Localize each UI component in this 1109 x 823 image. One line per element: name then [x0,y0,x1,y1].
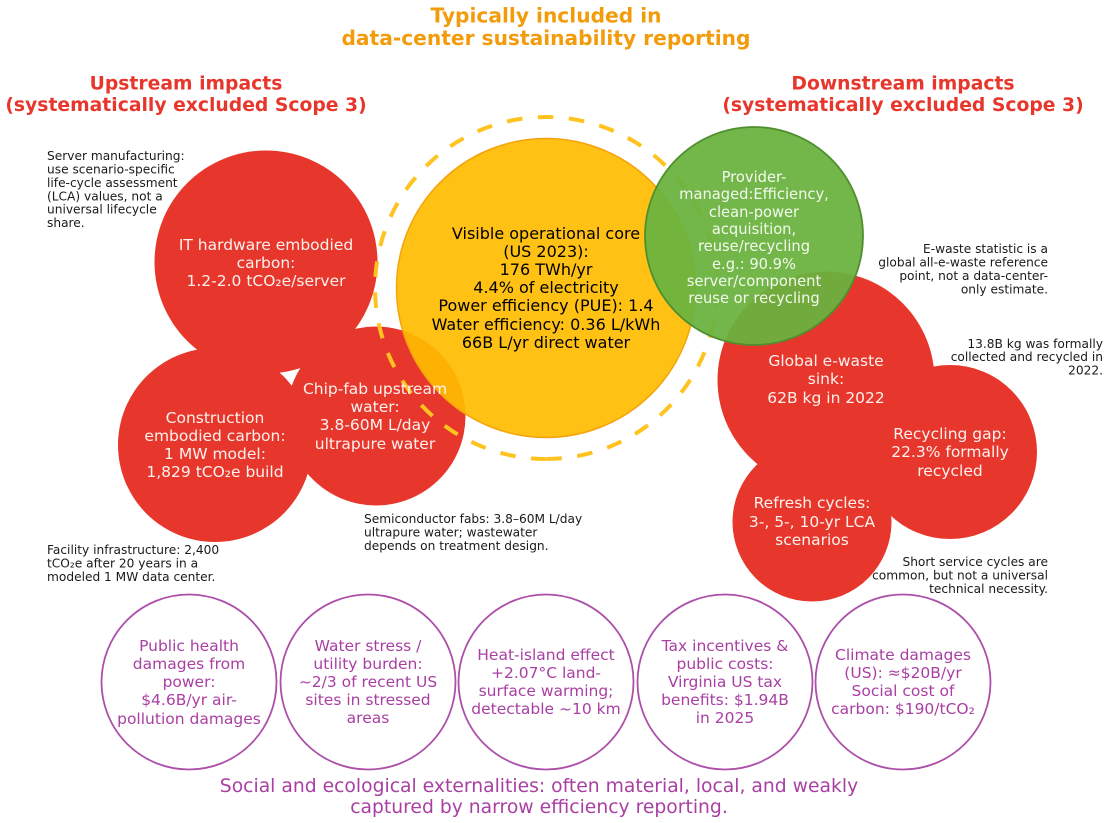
label: operational core: Power efficiency (PUE): 1.4 [438,296,654,315]
label: recycling gap [891,425,1009,480]
label: operational core: Water efficiency: 0.36 L/kWh [432,315,660,334]
label: IT hardware: IT hardware embodied [179,236,353,254]
externality: public health: $4.6B/yr air- [141,691,237,709]
externality: water stress: ~2/3 of recent US [299,673,437,691]
note: formally collected [951,337,1103,378]
label: provider-managed: server/component [687,273,822,290]
label: chip-fab [303,380,447,453]
circle: refresh cycles [732,442,892,602]
note: facility infrastructure: modeled 1 MW data center. [47,570,215,584]
externality: tax incentives: Tax incentives & [661,637,788,655]
label: operational core: Visible operational core [452,224,640,243]
caption: social and ecological externalities [220,776,858,818]
label: IT hardware: carbon: [237,254,295,272]
externality: tax incentives: in 2025 [696,709,754,727]
label: e-waste: sink: [808,370,844,388]
externality: water stress: Water stress / [315,637,422,655]
circle: construction embodied carbon [118,348,312,542]
externality: tax incentives [638,594,812,770]
externality: heat island: Heat-island effect [477,646,615,664]
externality: tax incentives: public costs: [676,655,774,673]
title: Typically included in [431,4,661,28]
externality: public health: pollution damages [117,710,261,728]
externality: tax incentives: Virginia US tax [668,673,782,691]
externality: heat island: +2.07°C land- [491,664,601,682]
externality: public health [102,594,276,770]
note: server manufacturing: life-cycle assessment [47,176,178,190]
label: chip-fab: 3.8-60M L/day [320,416,430,434]
label: IT hardware [179,236,353,290]
note: short service cycles [872,555,1048,596]
externality: water stress: areas [347,709,389,727]
label: refresh cycles [749,494,875,549]
label: construction: 1 MW model: [164,445,266,463]
circle: IT hardware embodied carbon [154,150,378,374]
circle: recycling gap [863,365,1037,539]
label: refresh cycles: scenarios [775,531,849,549]
label: provider-managed: Provider- [722,169,786,186]
externality: public health: Public health [139,637,239,655]
label: refresh cycles: 3-, 5-, 10-yr LCA [749,513,875,531]
note: server manufacturing: universal lifecycle [47,203,157,217]
label: provider-managed: clean-power [709,204,800,221]
note: e-waste statistic: E-waste statistic is a [923,242,1048,256]
note: short service cycles: common, but not a universal [872,568,1048,582]
externality: water stress: utility burden: [313,655,423,673]
externality: water stress: sites in stressed [305,691,431,709]
label: operational core: 4.4% of electricity [473,278,619,297]
title: data-center sustainability reporting [341,26,751,50]
circle: global e-waste sink [718,272,934,488]
label: recycling gap: 22.3% formally [891,443,1009,461]
note: formally collected: 2022. [1068,364,1103,378]
heading: upstream impacts: Upstream impacts [90,74,282,94]
label: construction: embodied carbon: [144,427,286,445]
externality: public health: damages from [133,655,245,673]
note: semiconductor fabs: Semiconductor fabs: 3.8–60M L/day [364,512,582,526]
note: short service cycles: technical necessity. [929,582,1048,596]
note: e-waste statistic: global all-e-waste reference [878,256,1048,270]
note: facility infrastructure: tCO₂e after 20 years in a [47,556,198,570]
label: chip-fab: water: [350,398,400,416]
note: e-waste statistic: point, not a data-center- [899,269,1048,283]
label: provider-managed: managed:Efficiency, [679,186,829,203]
note: formally collected: 13.8B kg was formally [967,337,1103,351]
externality: climate damages [816,594,990,770]
externality: climate damages: (US): ≈$20B/yr [844,664,962,682]
note: e-waste statistic: only estimate. [961,282,1048,296]
label: chip-fab: Chip-fab upstream [303,380,447,398]
label: chip-fab: ultrapure water [315,435,436,453]
label: construction: 1,829 tCO₂e build [146,463,284,481]
label: provider-managed: e.g.: 90.9% [712,256,796,273]
label: construction: Construction [166,409,264,427]
circle: visible operational core [396,138,696,438]
note: server manufacturing: share. [47,216,85,230]
label: provider-managed [679,169,829,307]
note: server manufacturing: (LCA) values, not a [47,189,163,203]
note: server manufacturing [47,149,185,230]
label: IT hardware: 1.2-2.0 tCO₂e/server [187,272,346,290]
label: recycling gap: recycled [917,462,983,480]
label: provider-managed: reuse or recycling [688,290,820,307]
label: refresh cycles: Refresh cycles: [754,494,870,512]
note: formally collected: collected and recycled in [951,350,1103,364]
note: semiconductor fabs: depends on treatment design. [364,539,549,553]
externality: climate damages: Social cost of [852,682,955,700]
caption: social and ecological externalities: captured by narrow efficiency reporting. [350,797,728,818]
title [341,4,751,50]
heading: upstream impacts [5,74,367,116]
externality: public health: power: [163,673,215,691]
circle: provider-managed [645,127,863,345]
note: server manufacturing: use scenario-specific [47,162,175,176]
externality: climate damages: carbon: $190/tCO₂ [831,700,975,718]
label: operational core: 66B L/yr direct water [462,333,631,352]
label: construction [144,409,286,481]
heading: downstream impacts [722,74,1084,116]
note: short service cycles: Short service cycles are [902,555,1048,569]
heading: upstream impacts: (systematically excluded Scope 3) [5,95,367,116]
label: recycling gap: Recycling gap: [893,425,1007,443]
circle: chip-fab upstream water [286,326,466,506]
label: e-waste [767,352,885,407]
externality: water stress [280,594,456,770]
label: e-waste: 62B kg in 2022 [767,389,885,407]
externality: heat island: surface warming; [479,682,613,700]
externality: tax incentives: benefits: $1.94B [661,691,789,709]
externality: climate damages: Climate damages [835,646,971,664]
label: operational core: (US 2023): [503,242,589,261]
label: operational core: 176 TWh/yr [500,260,593,279]
caption: social and ecological externalities: Social and ecological externalities: often material, local, and weakly [220,776,858,797]
dashed ring: operational boundary [375,117,717,459]
note: facility infrastructure: Facility infrastructure: 2,400 [47,543,219,557]
label: provider-managed: reuse/recycling [698,238,810,255]
heading: downstream impacts: Downstream impacts [791,74,1015,94]
note: semiconductor fabs [364,512,582,553]
label: provider-managed: acquisition, [712,221,796,238]
externality: heat island [458,594,634,770]
note: facility infrastructure [47,543,219,584]
label: operational core [432,224,660,352]
externality: heat island: detectable ~10 km [471,700,621,718]
note: semiconductor fabs: ultrapure water; wastewater [364,525,538,539]
heading: downstream impacts: (systematically excluded Scope 3) [722,95,1084,116]
note: e-waste statistic [878,242,1048,296]
label: e-waste: Global e-waste [768,352,884,370]
note: server manufacturing: Server manufacturing: [47,149,185,163]
